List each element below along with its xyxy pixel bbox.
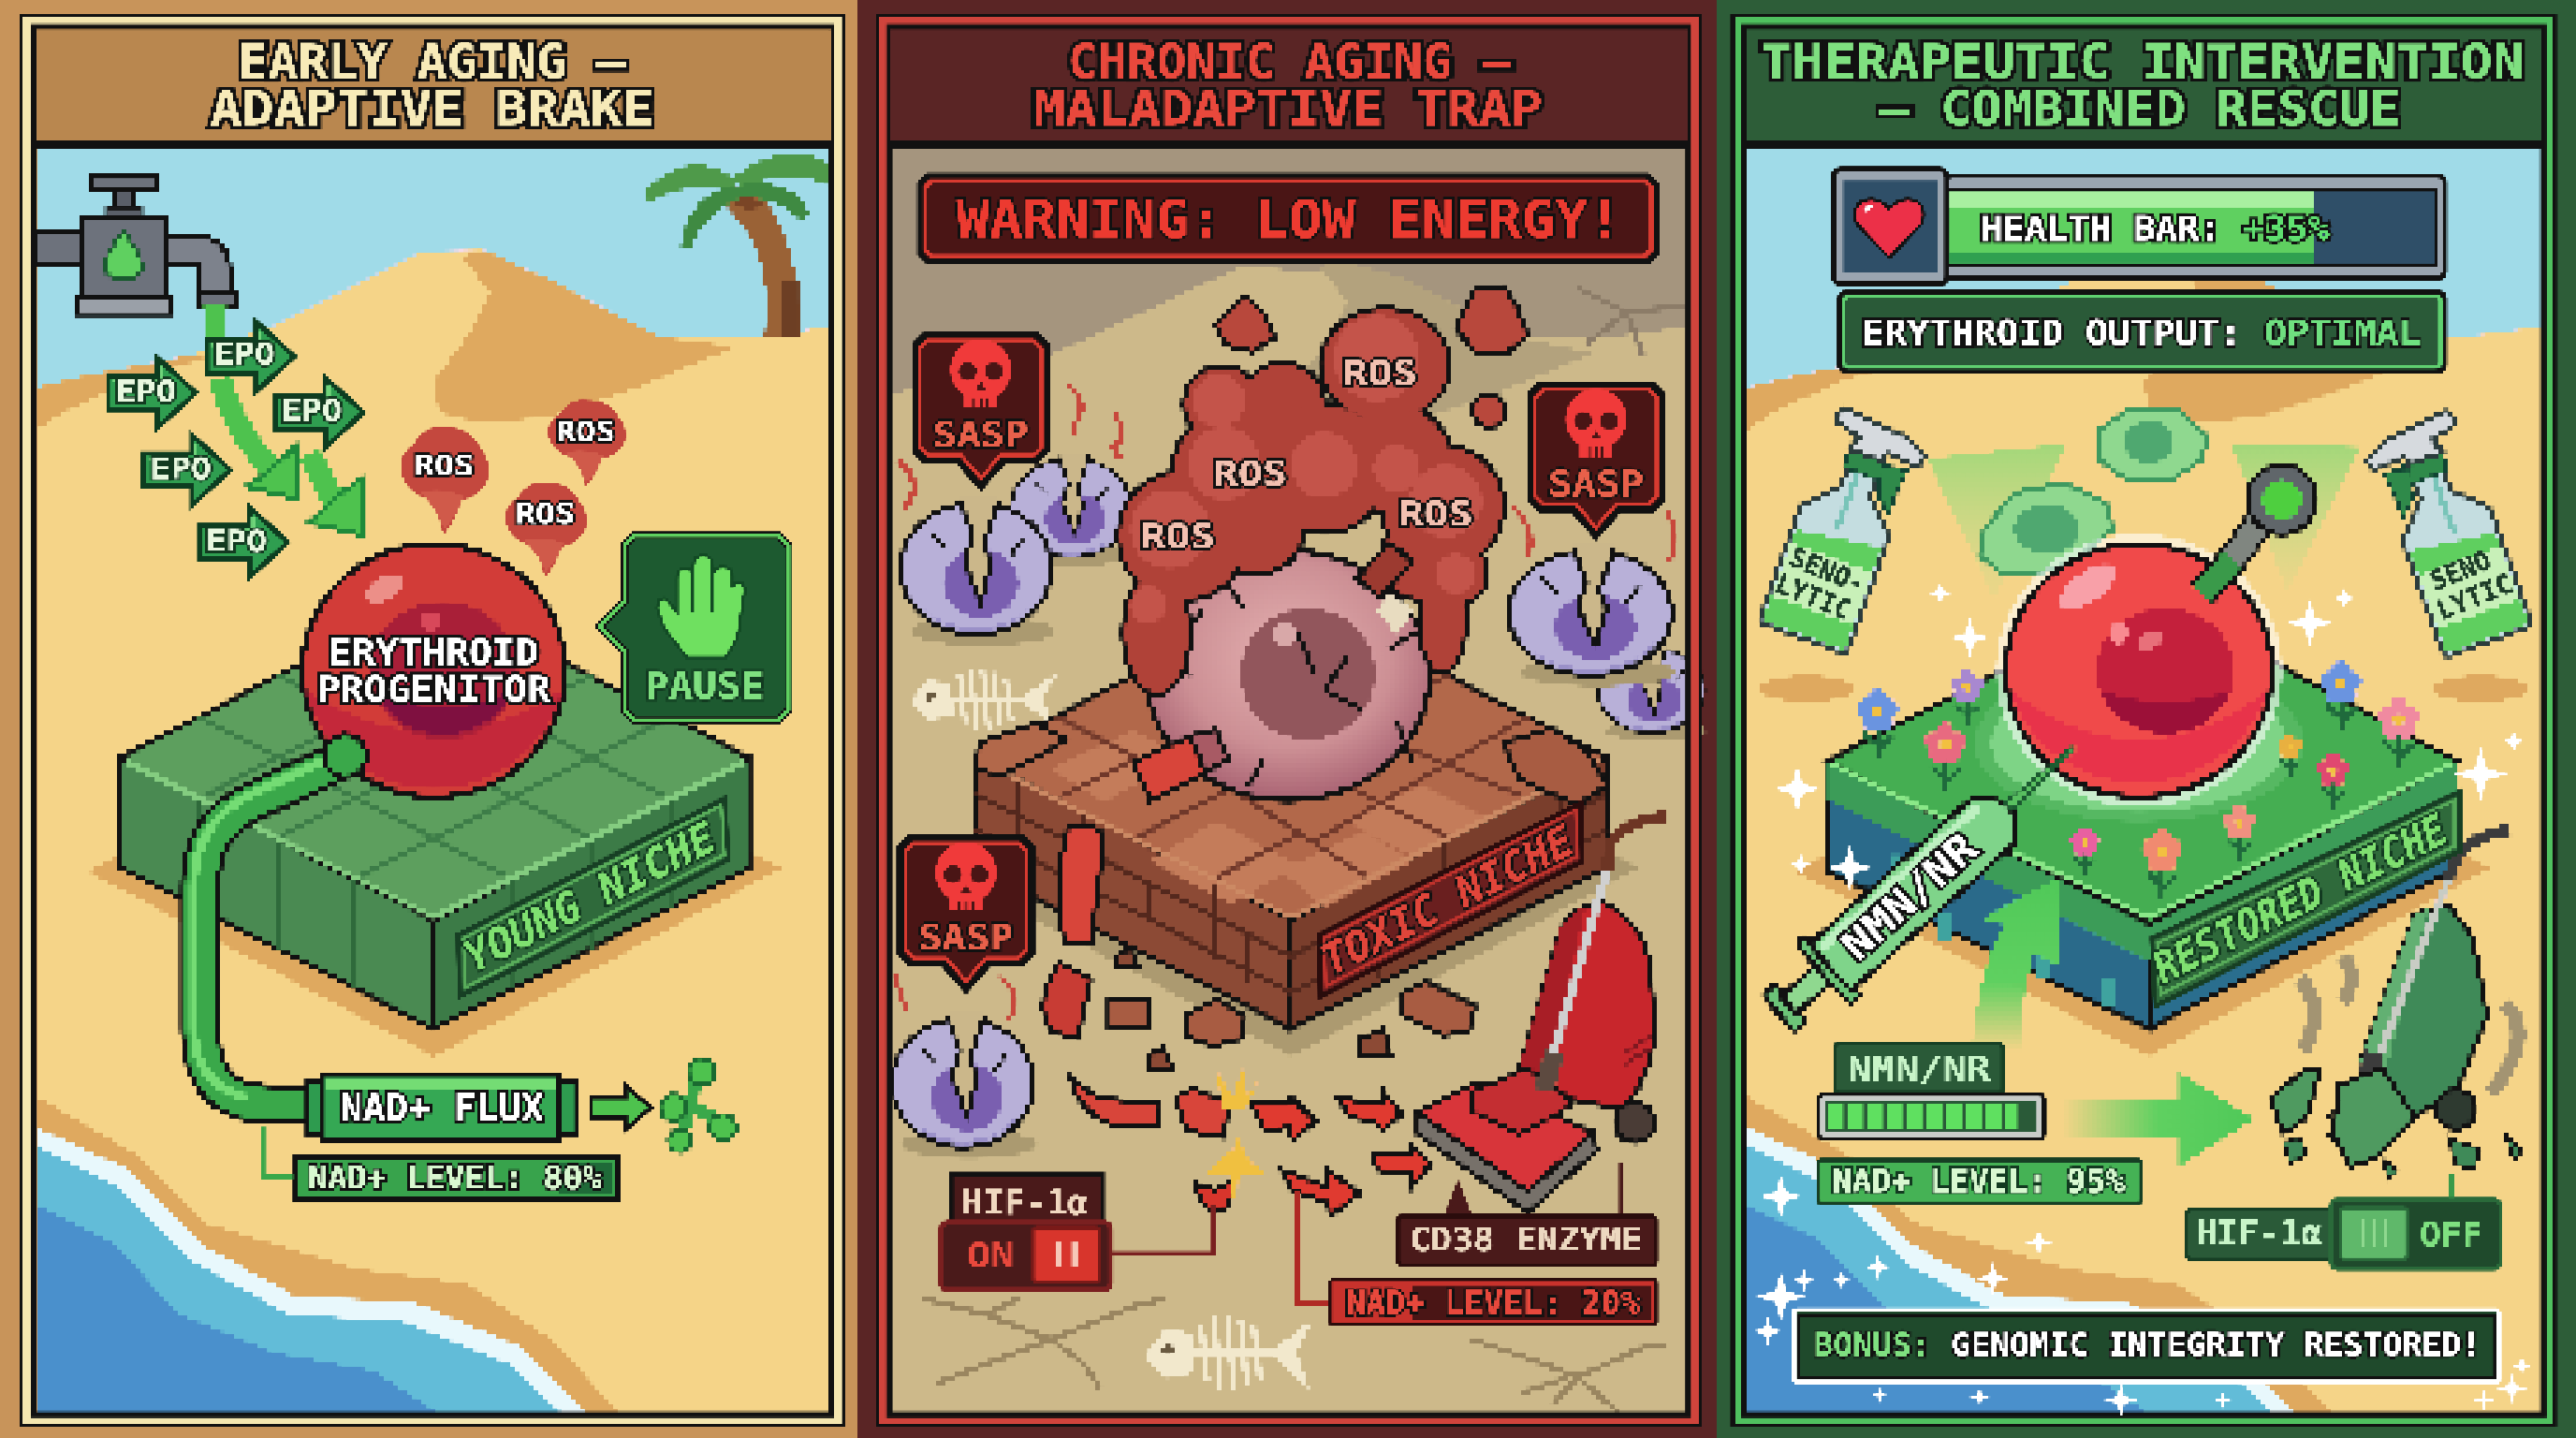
ROS cloud 2 [549,400,625,486]
HIF-1 alpha toggle off: OFF [2420,1214,2482,1255]
ROS labels in smoke [1141,353,1472,556]
connector to NAD+ level [263,1127,294,1177]
background: beach and water [1747,250,2539,1414]
spray bottle right [2360,408,2533,660]
connector: vacuum to HIF toggle [2450,1173,2452,1199]
ROS labels in smoke: ROS [1213,454,1287,494]
erythroid output chip [1840,292,2445,372]
ROS cloud 3 [505,482,586,577]
icon: broken vacuum [2271,829,2522,1180]
NAD+ level 20% chip: NAD+ LEVEL: 20% [1346,1284,1640,1322]
icon: green probe [2202,465,2317,594]
HIF-1 alpha toggle off [2187,1199,2500,1269]
syringe label: NMN/NR [1833,824,1987,970]
arrow: curved NMN up arrow [1971,877,2060,1051]
arrow: EPO signal 1 [207,322,294,391]
artwork: chronic aging scene [890,144,1706,1414]
niche shadow [87,690,782,1057]
overlay: chronic aging labels [878,16,1700,1426]
overlay: early aging labels [22,16,842,1426]
SASP sign 2: SASP [1548,463,1644,506]
SASP sign 1 [915,335,1046,487]
icon: water tap [37,178,237,314]
heading band: ADAPTIVE BRAKE [211,81,654,137]
left bottle label: LYTIC [1771,567,1856,626]
icon: damaged cell [1147,550,1429,800]
panel frame [22,16,842,1426]
background: barren ground [890,259,1687,1414]
pipe: broken stub at top of cell [1357,542,1412,635]
arrow: EPO signal 2: EPO [116,375,177,409]
connector: HIF toggle to pipe break [1110,1205,1214,1254]
panel: chronic aging maladaptive trap [878,16,1706,1426]
SASP sign 3: SASP [918,917,1014,960]
artwork: early aging scene [37,144,831,1414]
heading band [36,30,831,148]
HIF-1 alpha toggle on [942,1175,1110,1290]
cell label: ERYTHROID [329,632,539,674]
cracks [923,287,1687,1412]
left bottle label: SENO- [1785,541,1870,600]
young niche plaque: YOUNG NICHE [456,813,724,982]
background: sky [37,144,831,1414]
right bottle label [2421,540,2517,626]
niche block: restored niche [1828,594,2456,1029]
spray bottle left [1759,405,1931,656]
ROS labels in smoke: ROS [1343,353,1417,393]
niche shadow [1794,690,2491,1057]
connector: NAD+ level to arrow [1297,1192,1331,1303]
right bottle label: SENO [2425,544,2496,597]
icon: palm tree [646,154,831,339]
background: hazy sky [890,144,1687,1414]
artwork: rescue scene [1747,144,2541,1414]
arrow: NMN blocks CD38 [2062,1072,2254,1167]
NMN/NR tab: NMN/NR [1848,1049,1991,1089]
senescent cell remnant 2 [1980,483,2113,575]
broken shells back [892,453,1706,1159]
NAD+ flux capsule: NAD+ FLUX [340,1086,544,1130]
toxic niche plaque: TOXIC NICHE [1313,815,1582,986]
background: beach and water [37,250,829,1414]
overlay: rescue labels [1734,16,2554,1426]
syringe [1751,717,2101,1045]
cell label line 2: PROGENITOR [317,669,551,712]
left bottle label [1771,540,1870,627]
health bar [1834,169,2445,285]
pipe fragments [1044,729,1431,1216]
niche shadow [944,690,1640,1057]
heading band: CHRONIC AGING – [1068,35,1512,90]
sparkles [1753,581,2532,1416]
flowers on niche [1857,662,2419,899]
heading band [1747,30,2541,148]
warning banner [920,176,1656,261]
callout: pause sign [600,536,788,720]
toxic ROS smoke cloud [1120,311,1501,692]
spray mist cones [1927,444,2361,600]
heading band: – COMBINED RESCUE [1880,81,2400,137]
fish skeleton lower [1145,1316,1312,1388]
NAD+ level 95% chip: NAD+ LEVEL: 95% [1833,1163,2125,1201]
HIF-1 alpha toggle on: ON [967,1235,1015,1275]
panel: therapeutic intervention combined rescue [1734,16,2554,1426]
ROS labels in smoke: ROS [1141,516,1215,556]
HIF-1 alpha toggle on: HIF-1α [962,1182,1089,1223]
SASP sign 2 [1530,385,1661,536]
icon: healthy erythroid cell [1996,535,2282,807]
niche block: toxic brick niche [976,594,1606,1029]
fish skeleton upper [910,669,1058,728]
restored niche plaque: RESTORED NICHE [2144,805,2455,993]
warning banner: WARNING: LOW ENERGY! [956,190,1621,251]
ROS cloud 1: ROS [415,449,474,482]
NAD+ flux capsule [307,1075,577,1140]
right bottle label: LYTIC [2432,567,2517,626]
ROS labels in smoke: ROS [1398,494,1472,535]
ROS cloud 3: ROS [516,498,575,531]
SASP sign 1: SASP [933,414,1029,456]
arrow: EPO signal 2 [109,359,196,427]
connector: CD38 to vacuum [1447,1162,1621,1214]
ROS cloud 2: ROS [556,416,615,448]
arrow: EPO signal 4: EPO [151,453,212,487]
CD38 enzyme chip: CD38 ENZYME [1410,1221,1643,1259]
panel frame [878,16,1700,1426]
panel: early aging adaptive brake [22,16,842,1426]
arrow: EPO signal 1: EPO [214,338,275,372]
heading band [890,30,1687,148]
health bar: HEALTH BAR: +35% [1982,208,2330,248]
arrow: EPO signal 5: EPO [206,525,267,559]
background: sky [1747,144,2541,1414]
arrow: EPO signal 5 [200,507,287,577]
bonus banner: BONUS: GENOMIC INTEGRITY RESTORED! [1814,1327,2481,1364]
senescent cell remnant 1 [2098,409,2208,481]
heading band: EARLY AGING – [238,35,626,90]
tube: NAD+ supply pipe [194,735,366,1105]
brick rubble [1109,946,1475,1068]
arrow: EPO flow stream [215,306,365,536]
puff: smoke fragments [1216,286,1528,427]
NMN/NR supply bar [1819,1094,2043,1138]
sparks [1203,1068,1265,1208]
arrow: EPO signal 3: EPO [282,394,343,428]
bonus banner [1794,1310,2499,1382]
icon: erythroid progenitor cell [302,544,565,797]
arrow: flux to molecule [592,1086,651,1129]
erythroid output chip: ERYTHROID OUTPUT: OPTIMAL [1862,313,2421,354]
arrow: EPO signal 3 [276,378,363,447]
SASP sign 3 [900,838,1032,990]
CD38 enzyme chip [1398,1216,1656,1266]
niche block: young niche [121,594,749,1029]
icon: molecule [661,1058,736,1152]
callout: pause sign: PAUSE [645,666,765,708]
arrow: EPO signal 4 [143,435,230,505]
HIF-1 alpha toggle off: HIF-1α [2196,1213,2322,1254]
heading band: THERAPEUTIC INTERVENTION [1761,35,2525,90]
panel frame [1734,16,2554,1426]
sand ovals [1760,675,2528,702]
red heat wiggles [894,385,1675,1019]
NAD+ level 80% chip: NAD+ LEVEL: 80% [308,1159,602,1197]
heading band: MALADAPTIVE TRAP [1033,81,1543,137]
icon: CD38 vacuum [1418,816,1667,1212]
ROS cloud 1 [401,427,489,535]
NMN/NR tab [1835,1044,2002,1093]
